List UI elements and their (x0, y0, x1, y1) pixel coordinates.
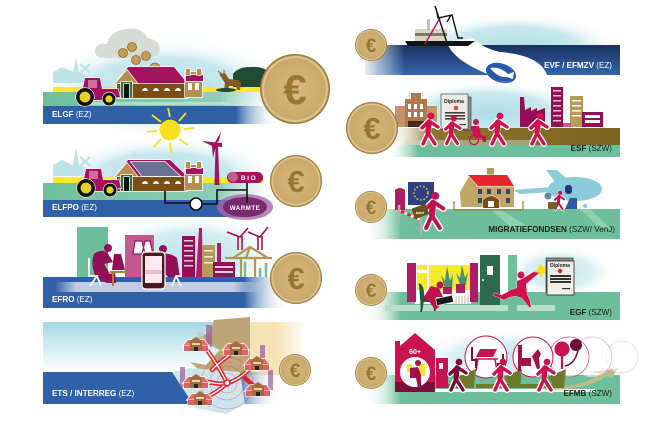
band (43, 183, 278, 200)
label: ETS / INTERREG (EZ) (52, 389, 135, 398)
sky glow (40, 38, 290, 138)
chair (172, 258, 184, 286)
sky glow (390, 80, 590, 144)
sky glow (410, 14, 620, 78)
warmte glow (217, 194, 273, 220)
diploma (546, 258, 574, 295)
band (365, 375, 620, 404)
pale arrow (545, 368, 618, 390)
label: EGF (SZW) (570, 308, 612, 317)
deer (218, 70, 241, 90)
label: EFRO (EZ) (52, 295, 93, 304)
coin: € (363, 111, 381, 146)
label: ESF (SZW) (571, 144, 612, 153)
fishing net wake (447, 38, 547, 75)
tall tower (551, 87, 563, 127)
coin (355, 357, 387, 389)
distant skyline (53, 58, 90, 83)
plants (441, 265, 468, 289)
tractor (77, 169, 121, 197)
panel: EFMB (355, 330, 638, 404)
desk (110, 272, 126, 286)
coin: € (366, 364, 377, 385)
arrow path (440, 369, 566, 388)
diploma: Diploma (444, 99, 464, 105)
wind turbine (202, 132, 222, 185)
eu flag (408, 182, 434, 205)
running person (493, 270, 539, 308)
panel: ELFPO (43, 108, 322, 220)
plane (513, 170, 602, 208)
tan block (570, 96, 583, 127)
sand panel (245, 322, 305, 375)
coin: € (290, 361, 301, 382)
ghost factories (180, 325, 273, 390)
wind turbines (227, 227, 268, 250)
pink block (125, 235, 154, 282)
diploma (441, 94, 471, 130)
coin: € (283, 66, 307, 113)
panel: ELGF (40, 29, 330, 138)
researcher right (158, 245, 180, 277)
network lines (205, 350, 256, 398)
factory (520, 97, 545, 127)
partner sites (183, 337, 271, 405)
flasks (133, 241, 153, 254)
panel: MIGRATIEFONDSEN (355, 168, 620, 239)
band (365, 292, 620, 320)
researcher left (92, 244, 125, 283)
sky glow (50, 136, 280, 220)
activity circles (465, 336, 638, 378)
chair (419, 284, 435, 312)
distant skyline (53, 147, 141, 176)
coin (355, 274, 387, 306)
label: ELFPO (EZ) (52, 203, 97, 212)
pump (190, 198, 202, 210)
luggage (548, 202, 557, 209)
warmte glow: WARMTE (230, 205, 260, 212)
spark (534, 263, 548, 278)
traveller (555, 192, 564, 209)
panel: ESF (346, 80, 620, 157)
coin (270, 252, 322, 304)
care icon (518, 345, 541, 371)
fence (454, 201, 523, 210)
cloud with coins (95, 29, 160, 73)
label: MIGRATIEFONDSEN (SZW/ VenJ) (488, 225, 615, 234)
harbour crane (225, 247, 272, 277)
trees (233, 67, 270, 87)
sky glow (420, 330, 580, 386)
coin: € (366, 198, 377, 219)
label: EVF / EFMZV (EZ) (544, 61, 612, 70)
migrant (425, 194, 443, 228)
sky glow (100, 215, 280, 295)
coin: € (366, 281, 377, 302)
window (407, 263, 478, 304)
wheelchair user (469, 119, 486, 145)
tractor (76, 78, 120, 106)
sky (43, 322, 233, 372)
sun (147, 108, 194, 153)
farm with solar roof (115, 160, 203, 191)
coin (355, 29, 387, 61)
coin: € (287, 261, 305, 296)
folder (436, 295, 454, 306)
sea (365, 45, 620, 75)
trees (554, 339, 582, 369)
maroon block (582, 112, 603, 127)
building (395, 93, 437, 127)
network hub (224, 380, 230, 386)
bio tank (227, 172, 263, 183)
network rays (201, 357, 253, 409)
border booth (395, 188, 405, 210)
ship (405, 6, 475, 46)
door (436, 358, 448, 388)
farmhouse (460, 168, 514, 208)
band (43, 92, 278, 106)
suitcase: Asiel (416, 211, 424, 215)
panel: EFRO (43, 215, 322, 308)
door (480, 255, 517, 315)
walkers (450, 360, 554, 390)
barrier (398, 205, 421, 234)
house: 60+ (409, 349, 421, 356)
coin (260, 54, 330, 124)
panel: ETS / INTERREG (43, 317, 311, 414)
pipes (165, 183, 247, 204)
band (43, 277, 288, 308)
air stairs (565, 198, 577, 209)
fish logo (483, 59, 519, 87)
seated person (423, 282, 444, 310)
farm (115, 67, 203, 98)
people (422, 114, 547, 144)
panel: EVF / EFMZV (355, 6, 620, 87)
city (182, 228, 235, 277)
band (43, 372, 278, 404)
bio tank: BIO (241, 175, 257, 182)
coin: € (366, 36, 377, 57)
sky glow (505, 246, 615, 298)
panel: EGF (355, 246, 620, 320)
coin (346, 102, 398, 154)
map land (190, 317, 250, 375)
classroom icon (472, 347, 503, 371)
chair (89, 258, 101, 286)
label: ELGF (EZ) (52, 110, 92, 119)
suitcase (411, 204, 429, 219)
house (395, 333, 435, 392)
radiator (456, 296, 468, 304)
coin: € (287, 164, 305, 199)
diploma: Diploma (550, 263, 570, 269)
coin (355, 191, 387, 223)
smartphone (142, 252, 165, 289)
coin (270, 155, 322, 207)
band (365, 209, 620, 239)
band (385, 128, 620, 145)
label: EFMB (SZW) (563, 389, 612, 398)
green block (77, 227, 108, 277)
coin (279, 354, 311, 386)
